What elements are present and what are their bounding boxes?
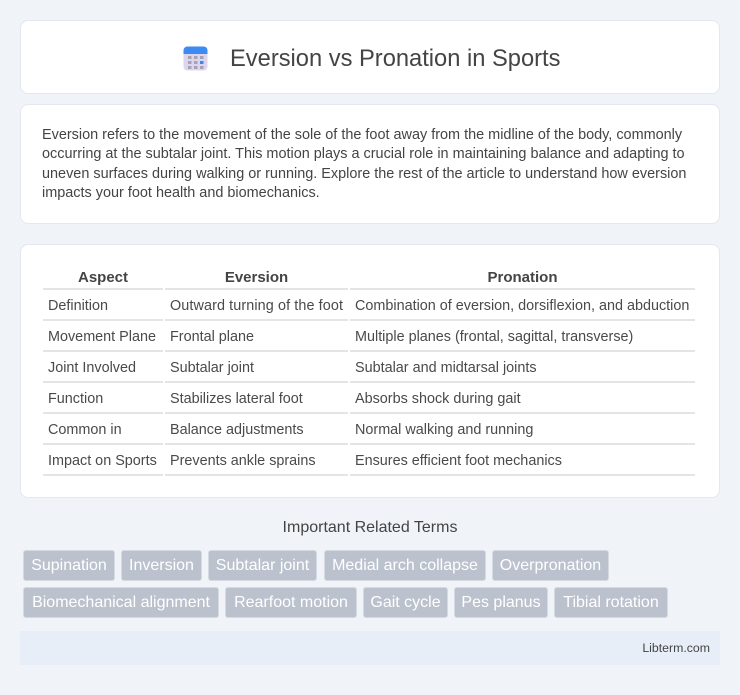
comparison table: Absorbs shock during gait — [355, 391, 521, 407]
comparison table: Eversion — [225, 269, 288, 286]
related term chips: Tibial rotation — [563, 594, 659, 611]
intro text: uneven surfaces during walking or running. Explore the rest of the article to understand how eversion — [42, 166, 686, 182]
related term chips: Inversion — [129, 557, 194, 574]
intro text: occurring at the subtalar joint. This motion plays a crucial role in maintaining balance and adapting to — [42, 146, 685, 162]
comparison table: Movement Plane — [48, 329, 156, 345]
comparison table: Function — [48, 391, 103, 407]
related terms heading: Important Related Terms — [283, 519, 457, 536]
comparison table: Outward turning of the foot — [170, 298, 343, 314]
comparison table: Combination of eversion, dorsiflexion, and abduction — [355, 298, 689, 314]
comparison table: Subtalar and midtarsal joints — [355, 360, 537, 376]
comparison table: Ensures efficient foot mechanics — [355, 453, 562, 469]
intro text — [42, 127, 686, 201]
header card — [20, 20, 720, 94]
comparison table: Stabilizes lateral foot — [170, 391, 303, 407]
footer bar — [20, 631, 720, 665]
comparison table: Definition — [48, 298, 108, 314]
related term chips: Subtalar joint — [216, 557, 309, 574]
intro card — [20, 104, 720, 224]
related term chips: Supination — [31, 557, 107, 574]
comparison table: Frontal plane — [170, 329, 254, 345]
related term chips: Medial arch collapse — [332, 557, 478, 574]
comparison table: Subtalar joint — [170, 360, 254, 376]
intro text: Eversion refers to the movement of the sole of the foot away from the midline of the body, commonly — [42, 127, 682, 143]
comparison table — [43, 269, 695, 476]
related term chips: Biomechanical alignment — [32, 594, 210, 611]
comparison table: Pronation — [488, 269, 558, 286]
comparison table: Aspect — [78, 269, 128, 286]
comparison table: Multiple planes (frontal, sagittal, transverse) — [355, 329, 633, 345]
comparison table: Prevents ankle sprains — [170, 453, 316, 469]
related term chips: Overpronation — [500, 557, 601, 574]
related term chips: Rearfoot motion — [234, 594, 348, 611]
related term chips: Gait cycle — [370, 594, 441, 611]
comparison table: Common in — [48, 422, 122, 438]
comparison table: Joint Involved — [48, 360, 136, 376]
related term chips — [23, 550, 668, 618]
footer source: Libterm.com — [642, 641, 710, 655]
related term chips: Pes planus — [461, 594, 541, 611]
intro text: impacts your foot health and biomechanics. — [42, 185, 320, 201]
icon: calendar — [184, 46, 208, 70]
comparison table: Impact on Sports — [48, 453, 157, 469]
comparison table: Balance adjustments — [170, 422, 304, 438]
comparison table: Normal walking and running — [355, 422, 533, 438]
title: Eversion vs Pronation in Sports — [230, 46, 560, 72]
table card — [20, 244, 720, 498]
